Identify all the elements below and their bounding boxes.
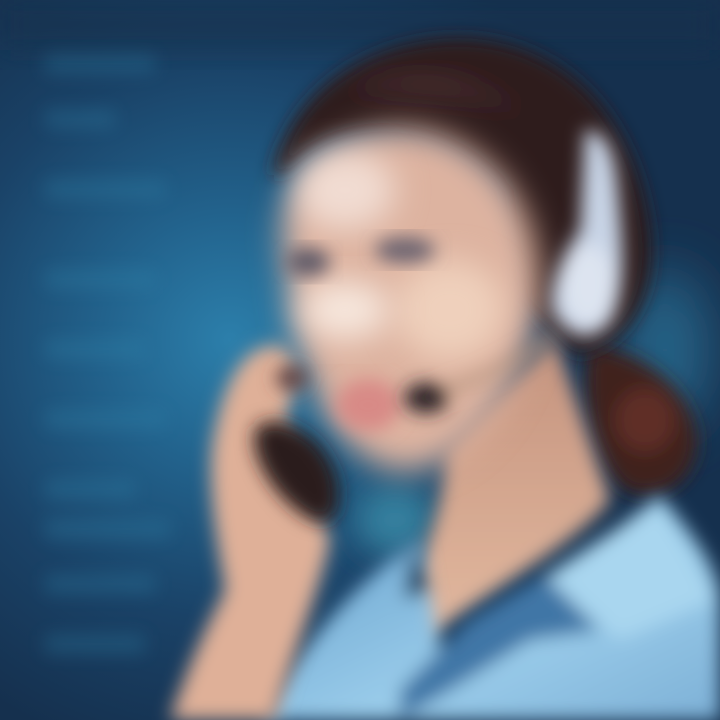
ponytail [585,345,697,494]
eyes [286,248,330,276]
mouth [336,379,400,431]
face [282,128,539,471]
arm and hand [170,345,330,720]
headset microphone [276,335,555,413]
neck [370,340,610,670]
phone [254,421,339,522]
headset ear cup [551,130,622,336]
decorative blurred text column [45,55,170,653]
hair [272,38,651,355]
shirt [265,495,720,720]
